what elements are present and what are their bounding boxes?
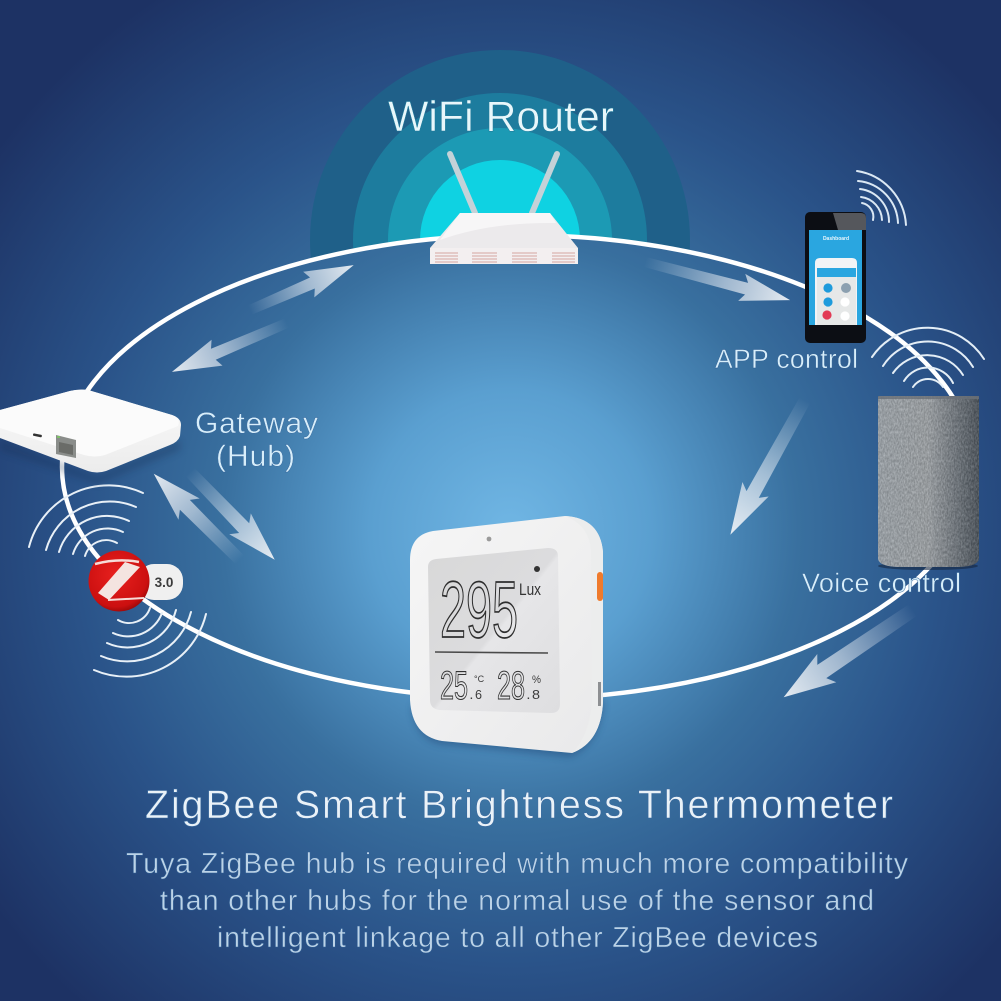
temperature and humidity readings: 25: [440, 664, 468, 708]
wifi waves: gateway lower: [94, 608, 206, 677]
description text: intelligent linkage to all other ZigBee devices: [217, 922, 818, 954]
router signal rings: [310, 50, 690, 258]
decimals and units: %: [532, 674, 541, 686]
icon: smartphone: [805, 212, 866, 343]
phone casing: [805, 212, 866, 343]
router body: [430, 213, 578, 264]
badge: Zigbee 3.0: [88, 550, 183, 612]
arrow: speaker to sensor: [774, 596, 923, 711]
orange button: [597, 572, 603, 601]
description text: than other hubs for the normal use of the sensor and: [160, 885, 874, 917]
label: Gateway (Hub): [195, 407, 318, 473]
label: Gateway (Hub): (Hub): [216, 440, 295, 473]
decimals and units: 6: [475, 687, 482, 702]
label: APP control: APP control: [715, 344, 858, 374]
icon: smart speaker: [878, 396, 979, 570]
title: ZigBee Smart Brightness Thermometer: [145, 783, 893, 827]
version pill: [138, 564, 183, 600]
hub shadow: [0, 440, 180, 484]
lux unit: Lux: [519, 580, 541, 599]
decimals and units: °C: [474, 674, 485, 684]
phone app icons: [822, 283, 851, 321]
wifi waves: phone: [857, 171, 906, 225]
speaker shadow: [878, 562, 978, 570]
speaker fabric body: [878, 396, 979, 567]
router vents: [435, 253, 575, 262]
label: Gateway (Hub): Gateway: [195, 407, 318, 440]
description text: [126, 848, 909, 954]
network loop line: [62, 235, 974, 699]
version text: 3.0: [155, 575, 173, 590]
arrow: hub side, down: [166, 310, 292, 385]
description text: Tuya ZigBee hub is required with much more compatibility: [126, 848, 909, 880]
decimals and units: 8: [532, 687, 540, 702]
side slot: [598, 682, 601, 706]
temperature and humidity readings: 28: [497, 664, 525, 708]
hub led slot: [33, 433, 42, 438]
e-ink screen: [428, 548, 560, 713]
router antennas: [450, 154, 557, 213]
wifi waves: gateway upper: [29, 485, 143, 556]
arrow: phone to sensor: [717, 393, 818, 542]
decimals and units: .: [527, 691, 530, 702]
phone app card: [815, 258, 857, 325]
arrow: router to phone: [641, 248, 794, 314]
hub top face: [0, 390, 179, 456]
label: Voice control: Voice control: [802, 568, 961, 598]
red Z logo: [88, 550, 150, 612]
battery glyph: [534, 566, 540, 572]
icon: gateway hub: [0, 390, 181, 484]
arrow: router to hub side, up: [244, 252, 359, 323]
decimals and units: [470, 674, 541, 702]
temperature and humidity readings: [440, 664, 525, 708]
sensor shadow: [412, 700, 604, 757]
icon: brightness thermometer sensor: [410, 516, 604, 757]
phone app title: Dashboard: [823, 236, 849, 242]
arrow: hub to sensor: [179, 462, 286, 570]
hub ethernet port: [56, 435, 76, 458]
screen divider: [435, 652, 548, 653]
hub body: [0, 390, 181, 472]
phone screen: [809, 230, 862, 325]
lux reading: 295: [440, 565, 518, 654]
arrow: sensor to hub: [143, 463, 251, 571]
sensor side edge: [565, 516, 603, 753]
decimals and units: .: [470, 691, 473, 702]
icon: wifi router: [430, 154, 578, 264]
heading: WiFi Router: WiFi Router: [388, 93, 614, 141]
light sensor hole: [487, 537, 491, 541]
sensor housing: [410, 516, 603, 753]
wifi waves: speaker: [872, 328, 984, 387]
